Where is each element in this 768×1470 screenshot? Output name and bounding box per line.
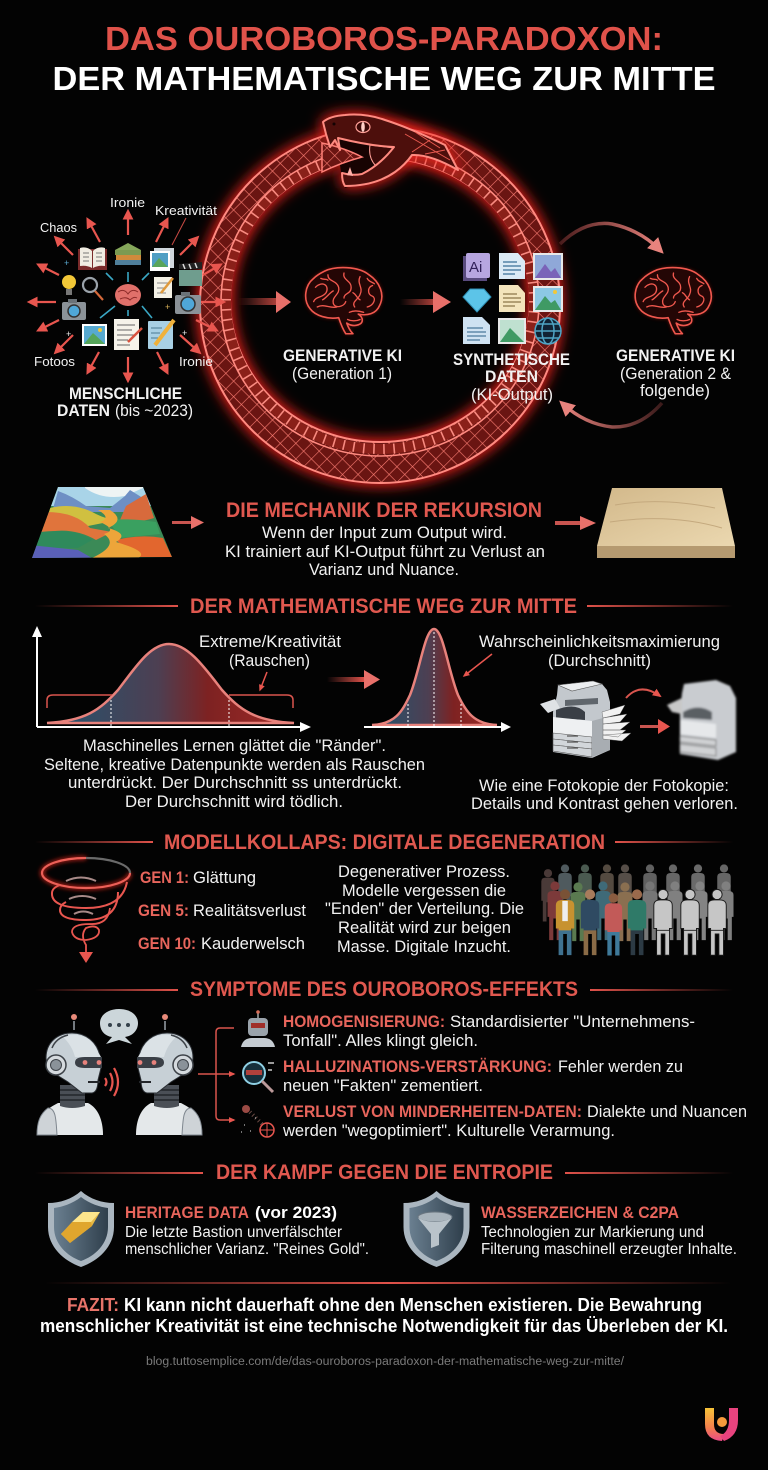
list: generations: Glättung	[193, 869, 256, 887]
icon: flat sand	[597, 488, 735, 558]
arrow	[555, 516, 596, 530]
snake tail tip	[322, 143, 362, 172]
text: heritage data: (vor 2023)	[255, 1203, 337, 1222]
label: generation 2: GENERATIVE KI	[616, 347, 735, 365]
small plus signs: +	[182, 328, 187, 338]
list: generations: Realitätsverlust	[193, 902, 306, 920]
icon: sharp copier	[540, 681, 631, 758]
icon: small brain	[100, 272, 152, 318]
text: watermarks: Filterung maschinell erzeugter Inhalte.	[481, 1241, 737, 1258]
radiating arrows	[30, 212, 223, 380]
label: extremes: Extreme/Kreativität	[199, 633, 341, 651]
text: minority data: Dialekte und Nuancen	[587, 1103, 747, 1121]
icon: crowd fading to grey	[541, 864, 734, 956]
text block: Wenn der Input zum Output wird.	[262, 524, 507, 542]
arrow: human data to AI	[238, 291, 291, 313]
ouroboros snake ring	[200, 115, 560, 483]
icon: notepad with pencil	[148, 320, 174, 349]
icon: document blue	[463, 317, 490, 344]
icon: brain generation 1	[306, 268, 382, 334]
text block	[225, 524, 545, 579]
small labels	[34, 195, 217, 369]
label: generation 1	[283, 347, 402, 383]
text block: smoothing: Der Durchschnitt wird tödlich.	[125, 793, 343, 811]
arrow	[172, 516, 204, 529]
logo	[705, 1408, 738, 1441]
mouth opening	[336, 136, 398, 188]
panel: human data cluster	[30, 195, 223, 420]
text: minority data: VERLUST VON MINDERHEITEN-DATEN:	[283, 1103, 582, 1121]
text: minority data	[282, 1103, 747, 1140]
section: fight against entropy	[35, 1161, 737, 1267]
small labels: Ironie	[110, 195, 145, 210]
icon: magnifier with data	[243, 1062, 274, 1092]
list: generations: GEN 5:	[138, 902, 189, 920]
section: mathematical path	[32, 595, 738, 813]
icon: blurred copier	[667, 680, 736, 760]
label: extremes	[199, 633, 341, 670]
text block: photocopy	[471, 777, 738, 813]
text block: degeneration: Modelle vergessen die	[342, 882, 506, 900]
icon: robot left	[37, 1014, 103, 1135]
icon: light bulb	[62, 275, 76, 295]
text: homogenisation: Standardisierter "Unternehmens-	[450, 1013, 695, 1031]
text: hallucination	[283, 1058, 683, 1095]
label: likelihood: (Durchschnitt)	[548, 652, 651, 670]
list: generations: GEN 1:	[140, 869, 189, 887]
panel: synthetic data icons	[463, 253, 563, 344]
small labels: Chaos	[40, 220, 77, 235]
text: watermarks: Technologien zur Markierung und	[481, 1224, 704, 1241]
label: likelihood	[479, 633, 720, 670]
title: DER MATHEMATISCHE WEG ZUR MITTE	[52, 60, 715, 97]
text: hallucination: HALLUZINATIONS-VERSTÄRKUNG:	[283, 1058, 552, 1076]
arrows: branching	[198, 1028, 234, 1120]
text: minority data: werden "wegoptimiert". Kulturelle Verarmung.	[282, 1122, 615, 1140]
icon: note	[154, 277, 173, 298]
arrow: copier straight	[640, 719, 670, 734]
list: generations: Kauderwelsch	[201, 935, 305, 953]
arrow: curve to curve	[327, 670, 380, 689]
label: extremes: (Rauschen)	[229, 652, 310, 670]
heading with rules: SYMPTOME DES OUROBOROS-EFFEKTS	[190, 978, 578, 1001]
label: synthetic data: DATEN	[485, 368, 538, 386]
small plus signs	[64, 258, 187, 339]
icon: camera left	[62, 299, 86, 320]
icon: photos	[150, 248, 174, 271]
text block: photocopy: Details und Kontrast gehen verloren.	[471, 795, 738, 813]
label: synthetic data: (KI-Output)	[471, 386, 553, 404]
icon: document	[499, 253, 525, 279]
text block: degeneration: "Enden" der Verteilung. Die	[325, 900, 524, 918]
conclusion text: menschlicher Kreativität ist eine technische Notwendigkeit für das Überleben der KI.	[40, 1316, 728, 1336]
label: likelihood: Wahrscheinlichkeitsmaximierung	[479, 633, 720, 651]
icon: note document	[499, 285, 525, 312]
label: synthetic data: SYNTHETISCHE	[453, 351, 570, 369]
icon: camera right	[175, 292, 201, 314]
icon: colorful landscape	[30, 485, 175, 560]
icon: book	[78, 247, 107, 270]
text block: KI trainiert auf KI-Output führt zu Verlust an	[225, 543, 545, 561]
text: hallucination: Fehler werden zu	[558, 1058, 683, 1076]
icon: magnifier	[83, 278, 103, 300]
icon: shield with gold	[48, 1191, 114, 1267]
small labels: Ironie	[179, 354, 213, 369]
conclusion text: FAZIT:	[67, 1295, 119, 1315]
arrow: feedback curve bottom	[563, 403, 662, 427]
small labels: Kreativität	[155, 203, 217, 218]
title	[52, 20, 715, 97]
heading: human data: MENSCHLICHE	[69, 385, 182, 403]
snake head glow	[323, 115, 458, 186]
icon: clapper	[179, 262, 202, 286]
text: heritage data	[125, 1203, 369, 1258]
icon: picture	[82, 324, 107, 346]
section: mechanics of recursion	[30, 485, 735, 579]
icon: sound waves	[105, 1068, 118, 1096]
text block: smoothing: unterdrückt. Der Durchschnitt ss unterdrückt.	[68, 774, 402, 792]
small labels: Fotoos	[34, 354, 76, 369]
text block: photocopy: Wie eine Fotokopie der Fotokopie:	[479, 777, 729, 795]
small plus signs: +	[64, 258, 69, 268]
arrow: copier curve	[626, 689, 660, 698]
icon: spiral funnel	[42, 858, 130, 963]
icon: speech bubble	[100, 1009, 138, 1044]
icon: robot head	[241, 1010, 275, 1047]
icon: picture green two	[498, 318, 526, 344]
text: heritage data: Die letzte Bastion unverfälschter	[125, 1224, 342, 1241]
section: model collapse	[35, 831, 734, 963]
list: generations	[138, 869, 306, 953]
arrow: AI to synthetic data	[400, 291, 451, 313]
conclusion text: KI kann nicht dauerhaft ohne den Menschen existieren. Die Bewahrung	[124, 1295, 702, 1315]
label: generation 2: folgende)	[640, 382, 710, 400]
arrow: feedback curve top	[560, 223, 660, 250]
heading: human data: DATEN	[57, 402, 110, 420]
front coloured people	[556, 889, 574, 955]
text: watermarks: WASSERZEICHEN & C2PA	[481, 1203, 679, 1222]
text: homogenisation	[283, 1013, 695, 1050]
middle row	[548, 881, 734, 941]
heading: human data: (bis ~2023)	[115, 402, 193, 420]
back row	[541, 864, 731, 922]
text block: smoothing	[44, 737, 425, 811]
text: heritage data: menschlicher Varianz. "Reines Gold".	[125, 1241, 369, 1258]
heading with rules: MODELLKOLLAPS: DIGITALE DEGENERATION	[164, 831, 605, 854]
text: heritage data: HERITAGE DATA	[125, 1203, 249, 1222]
small plus signs: +	[66, 329, 71, 339]
label: generation 2	[616, 347, 735, 400]
icon: picture violet	[533, 253, 563, 280]
icon: brain generation 2	[635, 268, 711, 334]
text: homogenisation: Tonfall". Alles klingt gleich.	[283, 1032, 478, 1050]
chart: wide bell curve	[32, 626, 311, 732]
icon: ai file: Ai	[469, 259, 482, 276]
text: hallucination: neuen "Fakten" zementiert.	[283, 1077, 483, 1095]
heading with rules: DER KAMPF GEGEN DIE ENTROPIE	[216, 1161, 553, 1184]
icon: shield with funnel	[404, 1191, 470, 1267]
snake head	[323, 115, 458, 186]
icon: diamond	[463, 289, 491, 312]
heading: DIE MECHANIK DER REKURSION	[226, 499, 542, 522]
small plus signs: +	[165, 302, 170, 312]
icon: robot right	[136, 1014, 202, 1135]
icon: particles and globe	[241, 1105, 274, 1137]
icon: picture green	[533, 286, 563, 312]
text block: degeneration	[325, 863, 524, 956]
heading with rules: DER MATHEMATISCHE WEG ZUR MITTE	[190, 595, 577, 618]
text block: smoothing: Maschinelles Lernen glättet die "Ränder".	[83, 737, 386, 755]
conclusion text	[40, 1295, 728, 1336]
section: symptoms	[35, 978, 747, 1140]
text block: degeneration: Masse. Digitale Inzucht.	[337, 938, 511, 956]
source url: blog.tuttosemplice.com/de/das-ouroboros-paradoxon-der-mathematische-weg-zur-mitte/	[146, 1356, 625, 1368]
text block: degeneration: Degenerativer Prozess.	[338, 863, 510, 881]
label: generation 1: GENERATIVE KI	[283, 347, 402, 365]
list: generations: GEN 10:	[138, 935, 196, 953]
icon: document with pen	[114, 319, 142, 350]
text: homogenisation: HOMOGENISIERUNG:	[283, 1013, 445, 1031]
icon: book stack	[115, 243, 141, 265]
text block: degeneration: Realität wird zur beigen	[338, 919, 511, 937]
label: generation 2: (Generation 2 &	[620, 365, 731, 383]
text block: Varianz und Nuance.	[309, 561, 459, 579]
icon: globe	[535, 318, 561, 344]
chart: narrow bell curve	[364, 629, 511, 732]
label: synthetic data	[453, 351, 570, 404]
text: watermarks	[481, 1203, 737, 1258]
label: generation 1: (Generation 1)	[292, 365, 392, 383]
front grey people	[654, 889, 726, 955]
heading: human data	[57, 385, 193, 420]
title: DAS OUROBOROS-PARADOXON:	[105, 20, 663, 57]
text block: smoothing: Seltene, kreative Datenpunkte werden als Rauschen	[44, 756, 425, 774]
